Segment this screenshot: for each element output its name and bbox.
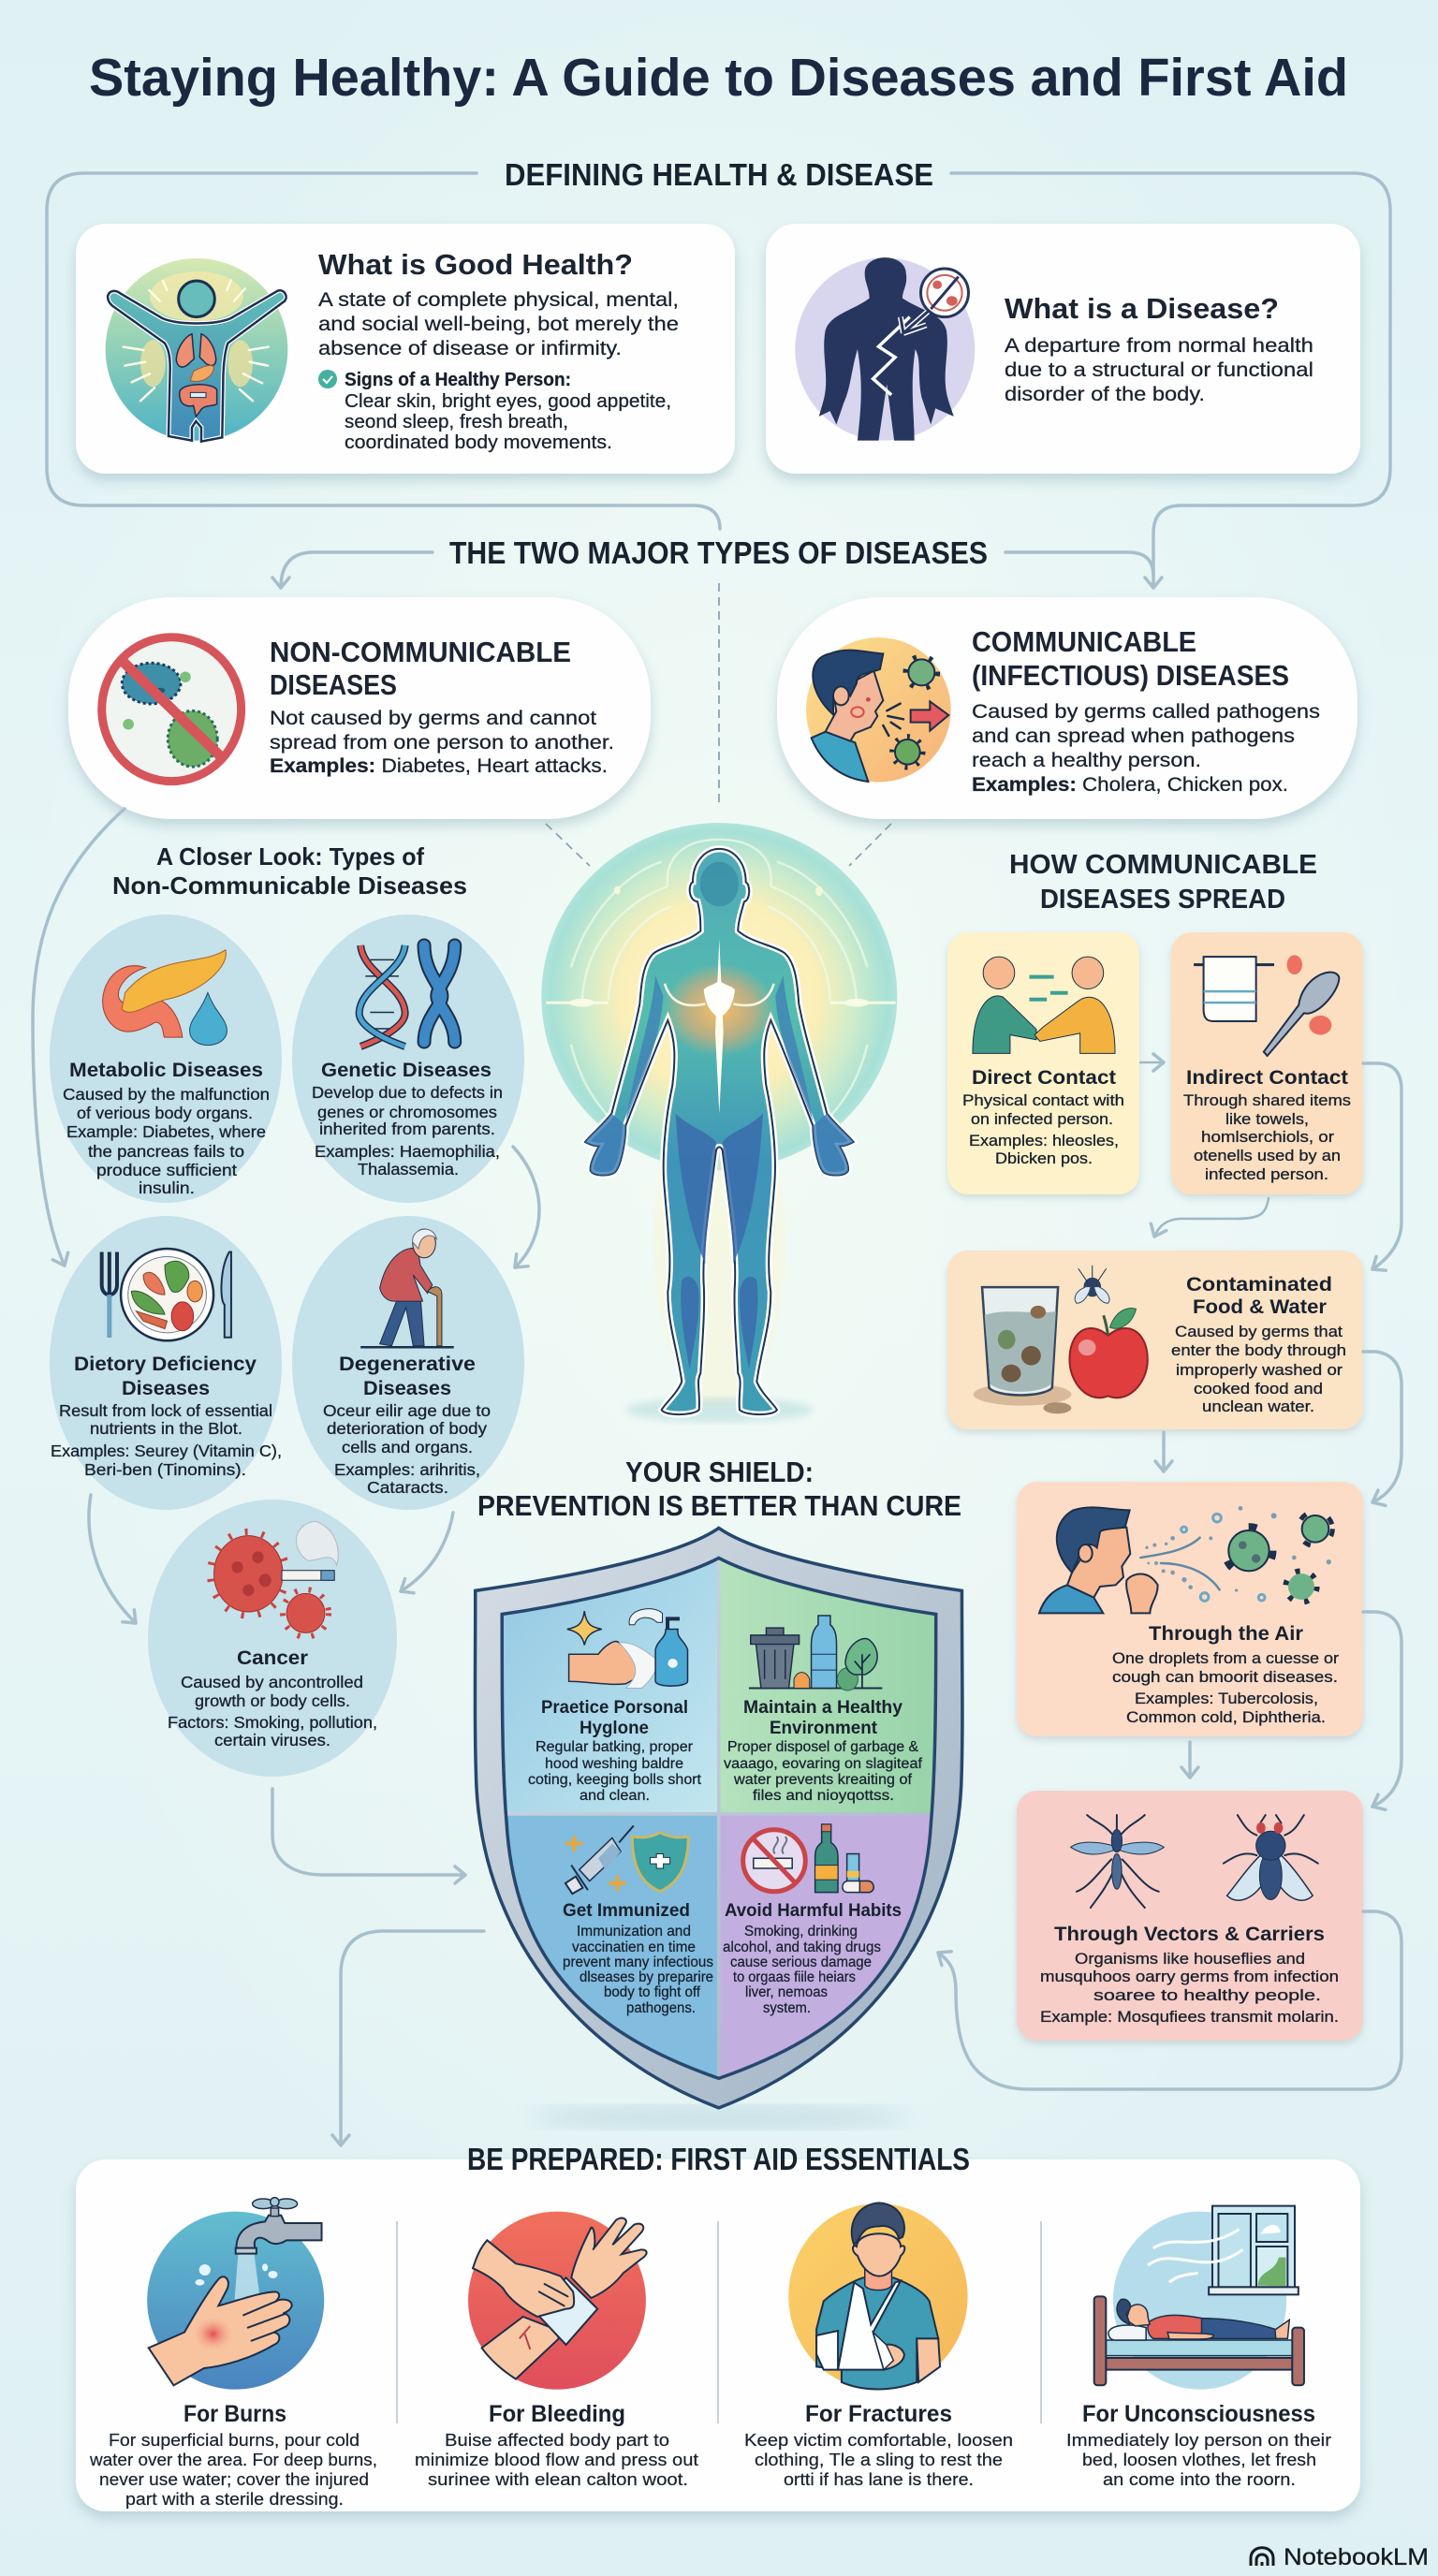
- icon: syringe and shield: [565, 1825, 688, 1894]
- text block: growth or body cells.: [195, 1691, 350, 1710]
- text block: Beri-ben (Tinomins).: [84, 1460, 246, 1479]
- text block: an come into the roorn.: [1103, 2469, 1296, 2489]
- quadrant: healthy environment text: Environment: [770, 1718, 877, 1738]
- panel: what is good health: [76, 224, 735, 474]
- icon: check: [318, 370, 337, 388]
- heading: DISEASES: [270, 668, 397, 701]
- text block: [51, 1401, 282, 1479]
- text block: definition: absence of disease or infirmity.: [318, 338, 622, 359]
- heading: [270, 636, 571, 701]
- text block: [1040, 1951, 1339, 2026]
- arrow: vectors to shield: [938, 1911, 1401, 2089]
- heading: Degenerative: [339, 1354, 476, 1375]
- text block: definition: [318, 289, 679, 359]
- arrow: contaminated to air (down): [1162, 1432, 1166, 1471]
- panel: cancer: [148, 1500, 397, 1777]
- quadrant: personal hygiene text: [528, 1697, 702, 1804]
- panel: communicable diseases: [777, 597, 1357, 819]
- heading: For Bleeding: [489, 2401, 625, 2427]
- icon: DNA and chromosome: [360, 945, 455, 1046]
- text block: unclean water.: [1202, 1398, 1314, 1415]
- text block: signs of a healthy person: [345, 370, 671, 453]
- quadrant: personal hygiene text: Praetice Porsonal: [541, 1697, 688, 1718]
- text block: [962, 1092, 1124, 1167]
- shield shadow: [532, 2106, 906, 2129]
- heading: two major types: THE TWO MAJOR TYPES OF DISEASES: [449, 535, 988, 570]
- text block: description: and can spread when pathogens: [972, 725, 1295, 747]
- text block: infected person.: [1205, 1166, 1328, 1183]
- text block: signs of a healthy person: Clear skin, bright eyes, good appetite,: [345, 391, 671, 412]
- text block: homlserchiols, or: [1201, 1129, 1335, 1146]
- text block: definition: and social well-being, bot merely the: [318, 314, 679, 335]
- heading: [74, 1354, 257, 1399]
- quadrant: harmful habits text: system.: [763, 2000, 811, 2016]
- icon: glass, fly and apple: [974, 1266, 1148, 1413]
- heading: For Fractures: [805, 2401, 952, 2427]
- icon: bleeding wound and cloth: [468, 2212, 647, 2390]
- text block: on infected person.: [971, 1111, 1113, 1128]
- text block: like towels,: [1225, 1111, 1309, 1128]
- icon: trash, bottle and tree: [749, 1616, 882, 1690]
- icon: cancer cells and cigarette: [210, 1521, 338, 1637]
- text block: musquhoos oarry germs from infection: [1040, 1969, 1339, 1985]
- text block: definition: A state of complete physical, mental,: [318, 289, 679, 311]
- text block: definition: A departure from normal health: [1005, 335, 1313, 357]
- text block: Example: Diabetes, where: [66, 1122, 266, 1141]
- text block: description: Examples: Cholera, Chicken pox.: [972, 774, 1288, 796]
- text block: [1171, 1324, 1346, 1415]
- text block: Immediately loy person on their: [1066, 2430, 1331, 2450]
- heading: (INFECTIOUS) DISEASES: [972, 659, 1289, 692]
- text block: ortti if has lane is there.: [784, 2469, 974, 2489]
- connector: two types split: [281, 552, 1153, 588]
- heading: how communicable diseases spread: DISEASES SPREAD: [1040, 885, 1285, 915]
- title: Staying Healthy: A Guide to Diseases and First Aid: [89, 48, 1348, 108]
- arrow: indirect to contaminated (left): [1154, 1198, 1269, 1237]
- text block: produce sufficient: [96, 1161, 237, 1179]
- heading: how communicable diseases spread: [1009, 850, 1317, 915]
- quadrant: immunized text: vaccinatien en time: [572, 1939, 696, 1955]
- text block: soaree to healthy people.: [1093, 1987, 1321, 2004]
- text block: Caused by ancontrolled: [181, 1673, 363, 1691]
- quadrant: harmful habits text: cause serious damage: [730, 1954, 872, 1970]
- quadrant: harmful habits text: Smoking, drinking: [744, 1924, 858, 1939]
- text block: Buise affected body part to: [445, 2430, 669, 2450]
- text block: Examples: hleosles,: [969, 1133, 1119, 1149]
- text block: [1066, 2430, 1331, 2489]
- quadrant: personal hygiene text: coting, keeging bolls short: [528, 1772, 702, 1788]
- text block: surinee with elean calton woot.: [428, 2469, 688, 2489]
- panel: indirect contact: [1171, 932, 1363, 1194]
- text block: Examples: arihritis,: [334, 1460, 480, 1479]
- icon: pancreas and drop: [103, 950, 227, 1046]
- heading: [1186, 1274, 1332, 1318]
- quadrant: healthy environment text: files and nioyqottss.: [753, 1788, 894, 1804]
- text block: [312, 1083, 503, 1178]
- connector: pill to non-communicable types: [33, 809, 125, 1266]
- arrow: direct to indirect: [1140, 1061, 1164, 1063]
- quadrant: healthy environment text: Proper disposel of garbage &: [727, 1739, 919, 1755]
- heading: What is a Disease?: [1005, 292, 1279, 325]
- arrow: air to vectors (right): [1363, 1612, 1401, 1807]
- text block: signs of a healthy person: Signs of a Healthy Person:: [345, 370, 571, 390]
- text block: never use water; cover the injured: [99, 2469, 369, 2489]
- heading: Diseases: [363, 1378, 451, 1399]
- text block: Common cold, Diphtheria.: [1126, 1709, 1326, 1726]
- heading: your shield: PREVENTION IS BETTER THAN CURE: [477, 1489, 961, 1522]
- panel: degenerative diseases: [292, 1216, 524, 1510]
- heading: Cancer: [237, 1647, 308, 1669]
- text block: cough can bmoorit diseases.: [1112, 1669, 1338, 1686]
- logo: NotebookLM: NotebookLM: [1284, 2544, 1429, 2570]
- heading: Diseases: [122, 1378, 210, 1399]
- text block: description: [270, 708, 614, 777]
- text block: signs of a healthy person: seond sleep, fresh breath,: [345, 412, 568, 432]
- text block: Caused by the malfunction: [63, 1085, 270, 1104]
- text block: definition: disorder of the body.: [1005, 384, 1205, 405]
- heading: What is Good Health?: [318, 248, 633, 281]
- text block: minimize blood flow and press out: [415, 2450, 698, 2469]
- icon: disease silhouette: [795, 257, 975, 441]
- icon: mosquito and housefly: [1071, 1815, 1318, 1908]
- quadrant: immunized text: body to fight off: [604, 1984, 701, 2000]
- arrow: air to vectors (down): [1188, 1742, 1192, 1778]
- text block: of verious body organs.: [77, 1104, 253, 1122]
- heading: For Burns: [183, 2401, 286, 2427]
- quadrant: immunized text: [563, 1900, 713, 2016]
- quadrant: immunized text: dlseases by preparire: [580, 1969, 713, 1985]
- quadrant: immunized text: pathogens.: [626, 2000, 696, 2016]
- text block: description: Not caused by germs and cannot: [270, 708, 596, 729]
- text block: Examples: Tubercolosis,: [1135, 1690, 1318, 1707]
- heading: Indirect Contact: [1186, 1067, 1348, 1089]
- text block: Example: Mosqufiees transmit molarin.: [1040, 2009, 1339, 2026]
- quadrant: harmful habits text: liver, nemoas: [745, 1984, 828, 2000]
- panel: genetic diseases: [292, 915, 524, 1203]
- heading: Through the Air: [1149, 1623, 1303, 1645]
- text block: the pancreas fails to: [88, 1142, 244, 1161]
- text block: Factors: Smoking, pollution,: [168, 1713, 377, 1732]
- heading: your shield: [477, 1456, 961, 1522]
- text block: nutrients in the Blot.: [90, 1419, 242, 1438]
- text block: Physical contact with: [962, 1092, 1124, 1109]
- icon: coughing person: [806, 637, 951, 783]
- text block: [63, 1085, 270, 1197]
- text block: genes or chromosomes: [317, 1103, 497, 1121]
- quadrant: personal hygiene text: hood weshing baldre: [545, 1756, 683, 1772]
- text block: [323, 1401, 491, 1497]
- text block: For superficial burns, pour cold: [109, 2430, 360, 2450]
- quadrant: immunized text: Get Immunized: [563, 1900, 690, 1921]
- text block: otenells used by an: [1194, 1148, 1341, 1164]
- icon: person resting by open window: [1094, 2206, 1304, 2390]
- text block: [1112, 1650, 1340, 1726]
- dashed connectors to body: [546, 583, 891, 866]
- icon: handshake: [973, 957, 1115, 1053]
- heading: how communicable diseases spread: HOW COMMUNICABLE: [1009, 850, 1317, 880]
- icon: towel and spoon: [1194, 955, 1339, 1056]
- arrow: contaminated to air (right): [1363, 1352, 1401, 1502]
- arrow: genetic to degenerative: [513, 1147, 539, 1267]
- text block: definition: [1005, 335, 1313, 405]
- heading: Food & Water: [1193, 1296, 1327, 1318]
- text block: clothing, Tle a sling to rest the: [755, 2450, 1003, 2469]
- heading: [972, 625, 1289, 692]
- panel: through the air: [1017, 1482, 1363, 1736]
- heading: For Unconsciousness: [1082, 2401, 1315, 2427]
- text block: [1183, 1092, 1351, 1183]
- quadrant: harmful habits text: alcohol, and taking drugs: [723, 1939, 881, 1955]
- text block: improperly washed or: [1176, 1362, 1343, 1379]
- icon: no smoking, bottle and pills: [743, 1824, 873, 1893]
- arrow: dietary to cancer: [89, 1495, 136, 1623]
- text block: Caused by germs that: [1175, 1324, 1343, 1340]
- heading: Dietory Deficiency: [74, 1354, 257, 1375]
- central human figure: [541, 823, 897, 1422]
- text block: Organisms like houseflies and: [1075, 1951, 1305, 1968]
- quadrant: personal hygiene text: and clean.: [580, 1788, 650, 1804]
- panel: contaminated food and water: [947, 1251, 1363, 1429]
- text block: water over the area. For deep burns,: [89, 2450, 377, 2469]
- heading: Metabolic Diseases: [69, 1060, 263, 1081]
- text block: Dbicken pos.: [995, 1150, 1093, 1167]
- heading: closer look: Non-Communicable Diseases: [112, 871, 467, 900]
- quadrant: healthy environment text: [724, 1697, 923, 1804]
- icon: arm in sling: [788, 2203, 968, 2390]
- text block: Thalassemia.: [358, 1160, 459, 1178]
- heading: NON-COMMUNICABLE: [270, 636, 571, 668]
- text block: deterioration of body: [327, 1419, 487, 1438]
- heading: your shield: YOUR SHIELD:: [625, 1456, 814, 1488]
- quadrant: healthy environment text: vaaago, eovaring on slagiteaf: [724, 1756, 923, 1772]
- quadrant: immunized text: prevent many infectious: [563, 1954, 713, 1970]
- text block: description: Caused by germs called pathogens: [972, 701, 1320, 723]
- text block: [89, 2430, 377, 2509]
- text block: cells and organs.: [342, 1438, 473, 1456]
- text block: inherited from parents.: [319, 1120, 495, 1138]
- arrow: shield to first aid: [341, 1931, 484, 2145]
- panel: prevention shield: [475, 1528, 962, 2108]
- heading: Through Vectors & Carriers: [1054, 1924, 1325, 1945]
- heading: Contaminated: [1186, 1274, 1332, 1295]
- panel: first aid essentials: [76, 2142, 1360, 2511]
- icon: coughing person and germs: [1039, 1506, 1332, 1613]
- text block: [168, 1673, 377, 1749]
- text block: Examples: Haemophilia,: [315, 1142, 500, 1161]
- text block: signs of a healthy person: coordinated body movements.: [345, 432, 612, 453]
- arrow: degenerative to cancer: [401, 1513, 453, 1591]
- icon: burn under running water: [147, 2198, 324, 2390]
- icon: hand washing: [567, 1609, 687, 1689]
- text block: cooked food and: [1194, 1381, 1323, 1398]
- heading: Genetic Diseases: [321, 1060, 492, 1081]
- panel: metabolic diseases: [50, 915, 282, 1203]
- quadrant: personal hygiene text: Hyglone: [580, 1718, 649, 1738]
- quadrant: harmful habits text: [723, 1900, 902, 2016]
- panel: what is a disease: [766, 224, 1360, 474]
- heading: closer look: [112, 842, 467, 900]
- text block: Develop due to defects in: [312, 1083, 503, 1102]
- text block: certain viruses.: [214, 1731, 330, 1749]
- text block: Keep victim comfortable, loosen: [744, 2430, 1013, 2450]
- heading: defining health and disease: DEFINING HEALTH & DISEASE: [505, 157, 933, 192]
- heading: closer look: A Closer Look: Types of: [156, 842, 424, 871]
- shield frame: [475, 1528, 962, 2108]
- panel: dietary deficiency diseases: [50, 1216, 282, 1510]
- heading: Direct Contact: [972, 1067, 1116, 1089]
- icon: plate with food: [102, 1249, 231, 1340]
- dividers: [397, 2221, 1041, 2423]
- panel: direct contact: [947, 932, 1139, 1194]
- arrow: cancer to shield: [272, 1789, 465, 1875]
- text block: description: [972, 701, 1320, 796]
- text block: [744, 2430, 1013, 2489]
- icon: healthy person: [106, 258, 287, 442]
- text block: [415, 2430, 698, 2489]
- text block: One droplets from a cuesse or: [1112, 1650, 1340, 1667]
- icon: elderly person with cane: [360, 1229, 454, 1347]
- icon: no germs: [102, 637, 242, 782]
- quadrant: healthy environment text: water prevents kreaiting of: [733, 1772, 913, 1788]
- text block: part with a sterile dressing.: [125, 2489, 344, 2509]
- connector: defining section frame: [47, 173, 1390, 588]
- quadrant: harmful habits text: to orgaas fiile heiars: [733, 1969, 856, 1985]
- heading: COMMUNICABLE: [972, 625, 1196, 658]
- arrow: indirect to contaminated (right): [1363, 1063, 1401, 1269]
- text block: description: reach a healthy person.: [972, 750, 1201, 771]
- panel: vectors and carriers: [1017, 1791, 1363, 2041]
- text block: definition: due to a structural or functional: [1005, 359, 1313, 381]
- text block: Through shared items: [1183, 1092, 1351, 1109]
- text block: description: spread from one person to another.: [270, 732, 614, 754]
- text block: enter the body through: [1171, 1342, 1346, 1359]
- text block: insulin.: [139, 1178, 195, 1197]
- text block: Result from lock of essential: [59, 1401, 272, 1420]
- quadrant: personal hygiene text: Regular batking, proper: [536, 1739, 693, 1755]
- text block: Examples: Seurey (Vitamin C),: [51, 1442, 282, 1460]
- text block: Oceur eilir age due to: [323, 1401, 491, 1420]
- quadrant: harmful habits text: Avoid Harmful Habits: [725, 1900, 902, 1921]
- heading: BE PREPARED: FIRST AID ESSENTIALS: [467, 2142, 970, 2176]
- quadrant: immunized text: Immunization and: [577, 1924, 691, 1939]
- text block: Cataracts.: [367, 1478, 448, 1497]
- text block: description: Examples: Diabetes, Heart attacks.: [270, 755, 608, 777]
- heading: [339, 1354, 476, 1399]
- quadrant: healthy environment text: Maintain a Healthy: [743, 1697, 902, 1718]
- panel: non-communicable diseases: [68, 597, 651, 819]
- text block: bed, loosen vlothes, let fresh: [1082, 2450, 1316, 2469]
